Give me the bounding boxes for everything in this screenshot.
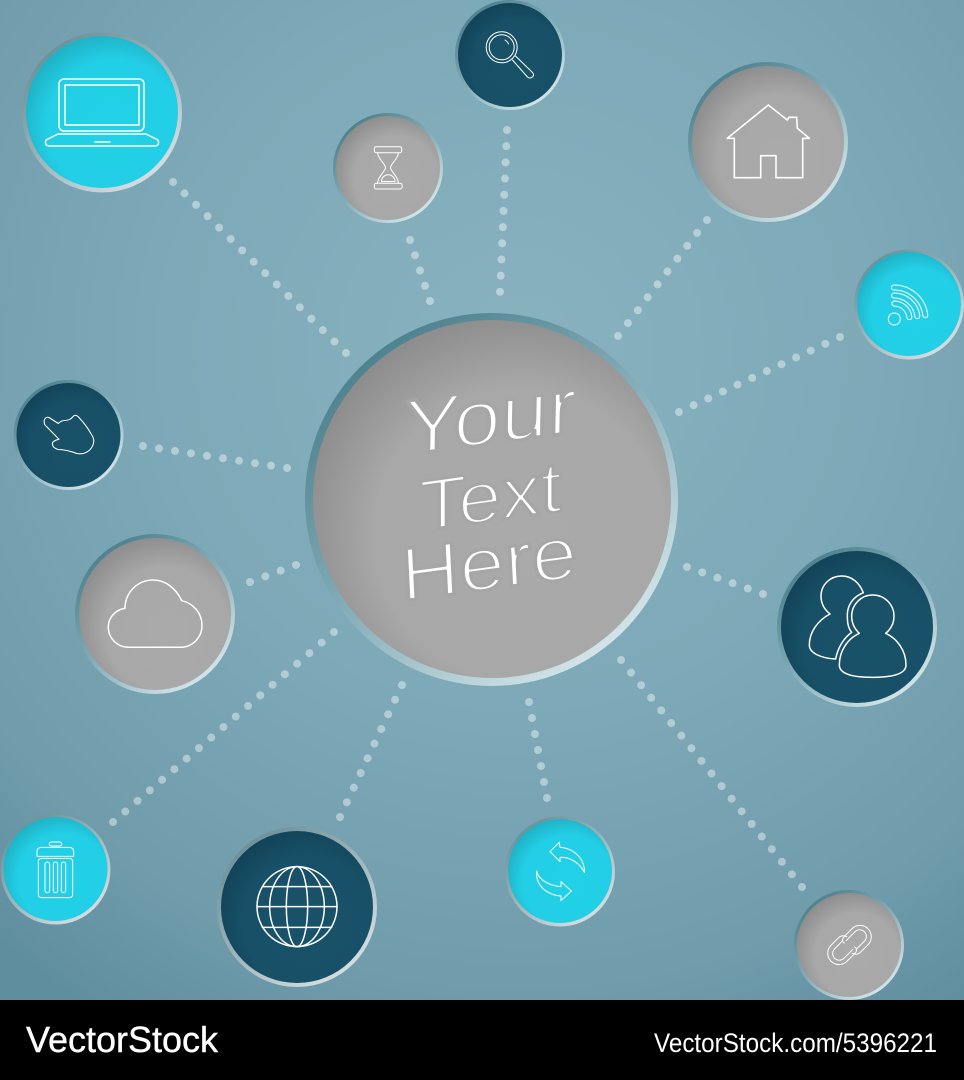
dotted connector: wifi <box>678 337 840 412</box>
icon: trash <box>37 842 74 898</box>
icon: magnifier <box>486 32 534 78</box>
dotted connector: magnifier <box>500 130 507 293</box>
dotted connector: link <box>620 659 802 887</box>
icon button: cloud <box>75 534 235 694</box>
icon: wifi <box>888 282 928 325</box>
central text: Text <box>419 447 562 547</box>
icon button: globe <box>217 827 377 987</box>
icon button: hand pointer <box>14 380 124 490</box>
central text: Here <box>399 509 579 617</box>
dotted connector: laptop <box>173 182 347 354</box>
dotted connector: people <box>687 567 764 594</box>
icon: hand pointer <box>44 415 94 454</box>
icon button: link <box>794 890 904 1000</box>
dotted connector: globe <box>340 684 402 817</box>
icon button: people <box>777 547 937 707</box>
icon button: laptop <box>22 32 182 192</box>
dotted connector: hourglass <box>410 240 430 302</box>
icon: cloud <box>108 580 202 647</box>
dotted connector: trash <box>113 631 335 822</box>
icon button: refresh <box>505 816 615 926</box>
footer logo text: VectorStock <box>26 1019 219 1060</box>
central text <box>399 361 579 617</box>
footer bar <box>0 1000 964 1080</box>
dotted connector: refresh <box>529 701 547 798</box>
icon button: magnifier <box>455 0 565 110</box>
icon button: home <box>688 62 848 222</box>
icon: home <box>727 105 809 178</box>
central text: Your <box>404 361 577 472</box>
icon: laptop <box>46 79 158 146</box>
icon: people <box>809 576 906 677</box>
panel: central circle <box>305 313 678 686</box>
icon button: wifi <box>854 250 964 360</box>
icon: globe <box>257 867 337 947</box>
dotted connector: hand <box>143 446 288 468</box>
icon: chain link <box>823 919 876 971</box>
footer image id text: VectorStock.com/5396221 <box>654 1028 937 1058</box>
icon button: hourglass <box>333 113 443 223</box>
icon: refresh arrows <box>537 842 584 901</box>
icon: hourglass <box>374 147 402 189</box>
dotted connector: home <box>617 220 707 337</box>
icon button: trash <box>0 814 110 924</box>
dotted connector: cloud <box>250 565 297 582</box>
